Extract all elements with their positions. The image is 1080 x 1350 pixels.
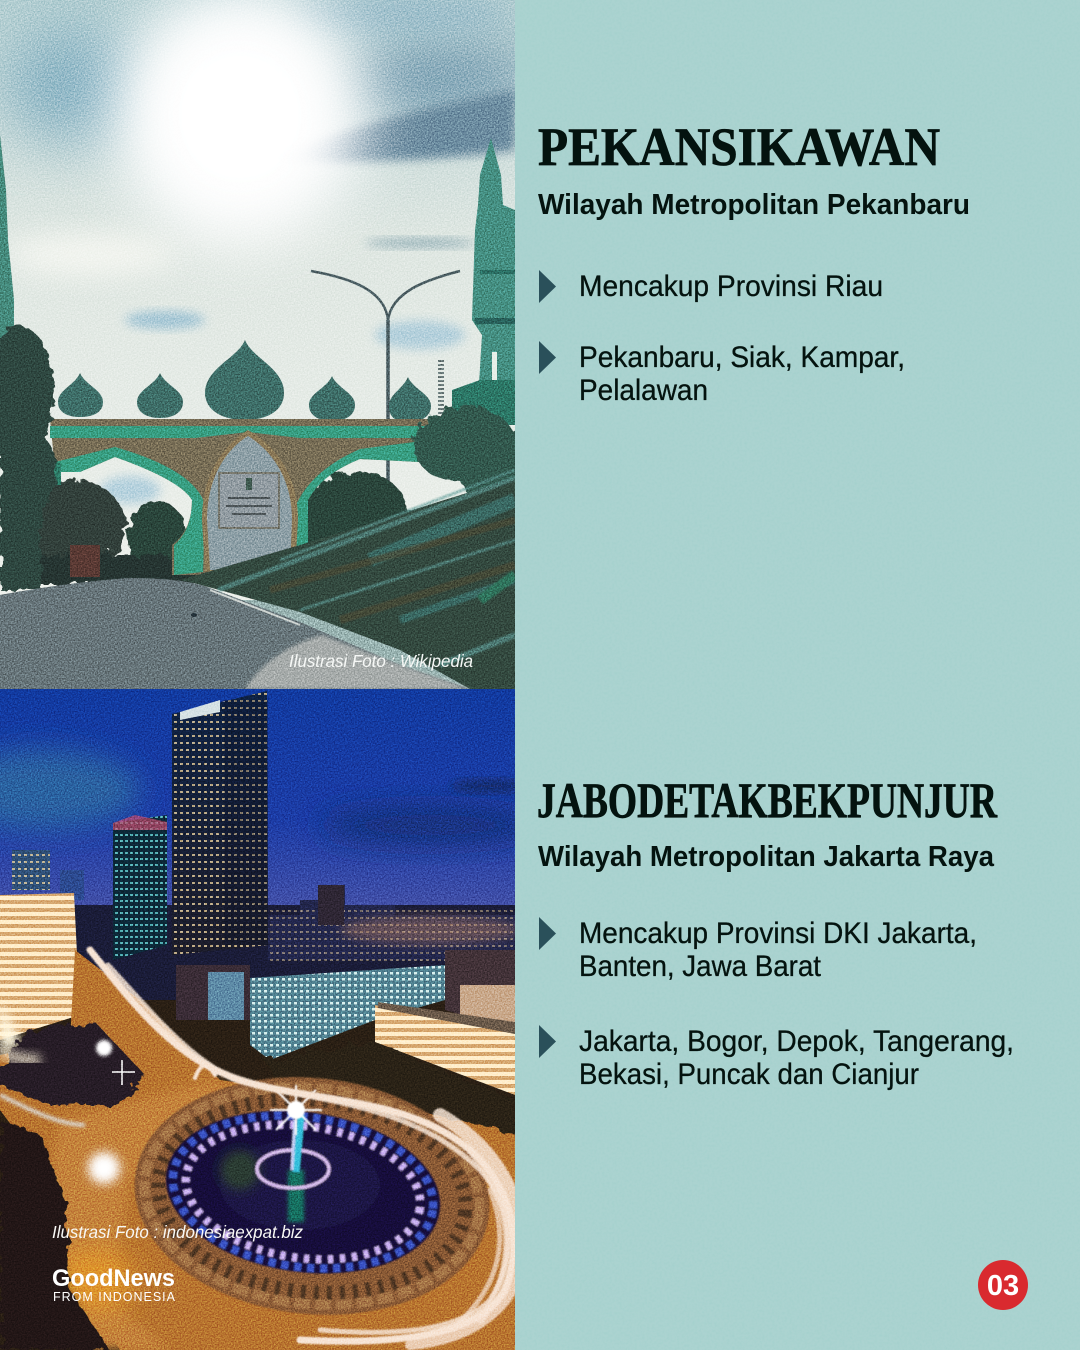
bullet text: cities: Bekasi, Puncak dan Cianjur — [579, 1058, 919, 1091]
trees behind arch — [0, 472, 415, 585]
caption: photo credit Wikipedia: Ilustrasi Foto : Wikipedia — [289, 651, 473, 671]
ground base — [0, 1000, 515, 1350]
panel: teal background — [515, 0, 1080, 1350]
sky — [0, 0, 540, 600]
section: Jabodetakbekpunjur — [537, 772, 1014, 1091]
bullet arrow — [539, 1025, 556, 1058]
onion domes — [58, 340, 431, 422]
night sky — [0, 689, 515, 905]
right minaret — [452, 138, 515, 425]
bullet text: province: Mencakup Provinsi Riau — [579, 270, 883, 303]
road — [0, 578, 470, 689]
bullet text: provinces — [579, 917, 977, 983]
gate arch — [50, 419, 445, 575]
bullet text: provinces: Banten, Jawa Barat — [579, 950, 822, 983]
photo: Jakarta Bundaran HI at night — [0, 689, 540, 1350]
bullet text: cities — [579, 1025, 1014, 1091]
fountain pool — [165, 1110, 442, 1274]
right hotel building — [375, 1002, 515, 1095]
mid buildings — [176, 950, 515, 1060]
roundabout plaza — [134, 1076, 490, 1316]
page number badge: 03 — [987, 1270, 1019, 1302]
bullet text: cities — [579, 341, 905, 407]
parked vehicle — [70, 545, 100, 577]
embankment hillside — [180, 470, 515, 689]
photo grain — [0, 0, 515, 689]
photo grain — [0, 689, 515, 1350]
section: Pekansikawan — [538, 117, 970, 407]
street lamp — [311, 271, 460, 490]
main skyscraper — [172, 691, 268, 955]
photo: Pekansikawan mosque gate — [0, 0, 540, 689]
orange roads — [0, 950, 515, 1350]
dark trees — [0, 1022, 515, 1350]
road sign — [54, 463, 61, 485]
bullet arrow — [539, 341, 556, 374]
logo: GoodNews from Indonesia: GoodNews — [52, 1265, 175, 1292]
left hotel building — [0, 893, 80, 1052]
bullet text: cities: Pelalawan — [579, 374, 708, 407]
distant city — [12, 850, 515, 1000]
bullet arrow — [539, 917, 556, 950]
left minaret — [0, 135, 14, 340]
second tower — [113, 815, 167, 960]
fountain sparkle — [270, 1085, 322, 1135]
subheading: Wilayah Metropolitan Pekanbaru — [538, 189, 970, 221]
page number badge — [978, 1260, 1028, 1310]
light trails — [90, 950, 520, 1345]
bullet text: provinces: Mencakup Provinsi DKI Jakarta, — [579, 917, 977, 950]
street glows — [0, 1040, 135, 1184]
logo: GoodNews from Indonesia — [52, 1265, 176, 1304]
radio tower — [438, 360, 444, 420]
subheading: Wilayah Metropolitan Jakarta Raya — [538, 841, 995, 873]
caption: photo credit indonesiaexpat.biz: Ilustrasi Foto : indonesiaexpat.biz — [52, 1222, 303, 1242]
bullet text: cities: Jakarta, Bogor, Depok, Tangerang, — [579, 1025, 1014, 1058]
logo: GoodNews from Indonesia: FROM INDONESIA — [53, 1290, 176, 1304]
tree mass left — [0, 325, 540, 590]
bullet arrow — [539, 270, 556, 303]
heading: Pekansikawan: PEKANSIKAWAN — [538, 117, 940, 177]
bullet text: cities: Pekanbaru, Siak, Kampar, — [579, 341, 905, 374]
